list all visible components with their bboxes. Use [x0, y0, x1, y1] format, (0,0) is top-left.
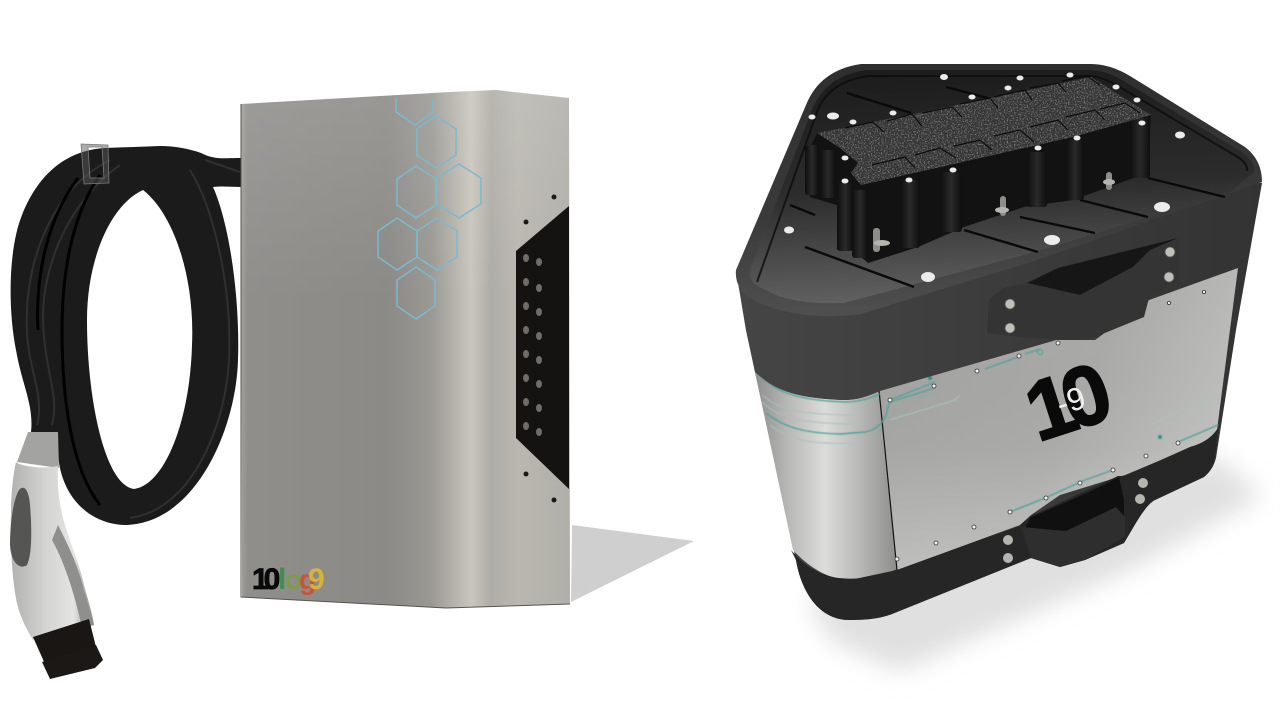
- top handle: [987, 238, 1179, 340]
- battery silver front panel: [879, 268, 1238, 571]
- bottom bumper: [791, 428, 1218, 620]
- charger logo 10log9: 10: [252, 563, 280, 596]
- honeycomb graphic: [378, 98, 481, 319]
- panel seam: [879, 390, 897, 570]
- plug grey grip: [10, 488, 31, 567]
- enclosure body: [241, 90, 570, 608]
- charger floor shadow: [571, 525, 694, 602]
- front panel lower sheen: [879, 268, 1238, 571]
- charger logo 10log9: 9: [308, 563, 325, 596]
- lower handle screws: [1003, 478, 1148, 563]
- tray standoffs: [873, 172, 1115, 252]
- handle screws: [1005, 247, 1175, 333]
- panel rivets: [888, 290, 1206, 561]
- battery body silhouette: [736, 183, 1262, 620]
- tray grooves: [790, 87, 1225, 287]
- charger logo 10log9: [252, 563, 325, 596]
- charger logo 10log9: l: [278, 563, 286, 596]
- circuit traces: [757, 349, 1218, 512]
- plug highlight shading: [52, 525, 94, 628]
- top dark band: [736, 160, 1262, 400]
- tray inner rim groove: [757, 76, 1247, 282]
- bottom bumper lower edge: [796, 526, 1031, 620]
- battery logo 1-90: -9: [1052, 379, 1090, 422]
- cable hanger clip: [81, 144, 109, 184]
- foam pad seams: [845, 76, 1140, 168]
- vent panel: [516, 206, 569, 489]
- foam top pad: [817, 77, 1151, 185]
- rim top face: [736, 64, 1262, 316]
- enclosure top sheen: [241, 90, 570, 300]
- enclosure outline edge: [241, 104, 570, 608]
- tray floor: [750, 70, 1254, 303]
- battery floor shadow: [808, 455, 1262, 672]
- charger enclosure: [241, 90, 570, 608]
- battery pack: [736, 64, 1262, 620]
- charger cable coil: [11, 146, 241, 525]
- cell cylinders: [805, 118, 1150, 258]
- plug head ring: [33, 619, 96, 664]
- lower handle: [1022, 507, 1125, 567]
- lower handle recess: [1025, 477, 1124, 540]
- handle recess: [1027, 238, 1178, 295]
- tray bolts: [784, 72, 1185, 282]
- vent holes: [523, 254, 542, 436]
- battery logo 1-90: 10: [1014, 345, 1120, 459]
- charging connector plug: [10, 432, 103, 679]
- battery cell module: [805, 76, 1151, 263]
- enclosure screws: [524, 194, 556, 502]
- module side: [808, 115, 1151, 263]
- plug body: [11, 462, 94, 640]
- handle grip and plates: [987, 238, 1179, 340]
- plug collar: [17, 432, 59, 468]
- plug barrel: [42, 645, 103, 679]
- battery silver side panel: [755, 372, 897, 579]
- charger logo 10log9: o: [285, 564, 302, 595]
- charger logo 10log9: g: [299, 564, 316, 595]
